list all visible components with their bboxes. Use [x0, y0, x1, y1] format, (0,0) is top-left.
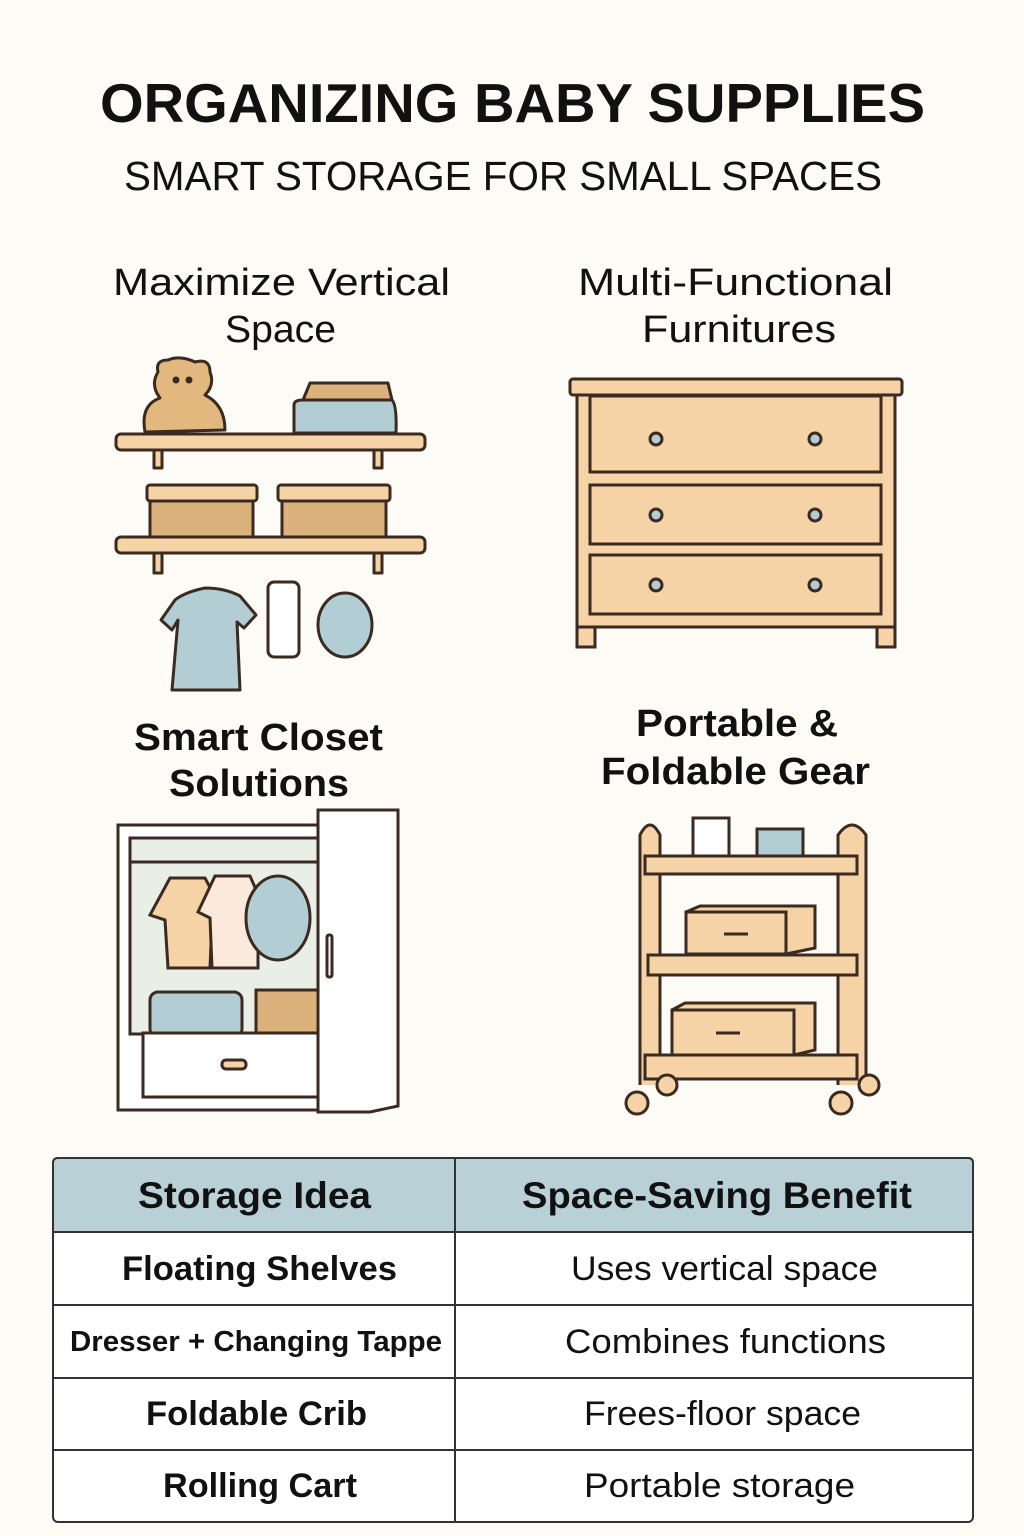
table rows	[70, 1250, 886, 1505]
subtitle: SMART STORAGE FOR SMALL SPACES	[124, 153, 882, 199]
heading: portable gear	[601, 703, 870, 793]
illustration: wall shelves	[116, 358, 425, 690]
drawers	[590, 396, 881, 614]
table rows: Floating Shelves	[122, 1250, 397, 1288]
heading: portable gear: Foldable Gear	[601, 751, 870, 793]
table rows: Frees-floor space	[584, 1395, 861, 1433]
heading: closet: Solutions	[169, 763, 349, 805]
table rows: Rolling Cart	[163, 1467, 357, 1505]
heading: closet: Smart Closet	[134, 717, 383, 759]
bins	[150, 990, 320, 1037]
heading: closet	[134, 717, 383, 805]
table header	[53, 1158, 973, 1232]
illustration: closet	[118, 810, 398, 1112]
heading: multi-functional: Furnitures	[642, 309, 836, 351]
table rows: Uses vertical space	[571, 1250, 878, 1288]
heading: multi-functional	[578, 262, 893, 351]
table	[53, 1158, 973, 1522]
icon: top basket	[294, 383, 396, 433]
door	[318, 810, 398, 1112]
icon: two storage boxes	[147, 485, 390, 537]
heading: vertical space	[113, 262, 450, 351]
table rows: Foldable Crib	[146, 1395, 367, 1433]
table rows: Portable storage	[584, 1467, 855, 1505]
illustration: rolling cart	[626, 818, 879, 1114]
icon: teddy bear	[144, 358, 225, 432]
illustration: dresser	[570, 379, 902, 647]
table header: Storage Idea	[138, 1175, 371, 1216]
heading: portable gear: Portable &	[636, 703, 838, 745]
table header: Space-Saving Benefit	[522, 1175, 912, 1216]
hanging clothes	[150, 876, 310, 968]
title: ORGANIZING BABY SUPPLIES	[100, 72, 925, 134]
heading: vertical space: Maximize Vertical	[113, 262, 450, 304]
wheels	[626, 1075, 879, 1114]
table rows: Dresser + Changing Tappe	[70, 1326, 442, 1358]
heading: vertical space: Space	[225, 309, 336, 351]
table rows: Combines functions	[565, 1323, 886, 1361]
icon: hanging shirt, bottle, bib	[161, 582, 372, 690]
heading: multi-functional: Multi-Functional	[578, 262, 893, 304]
